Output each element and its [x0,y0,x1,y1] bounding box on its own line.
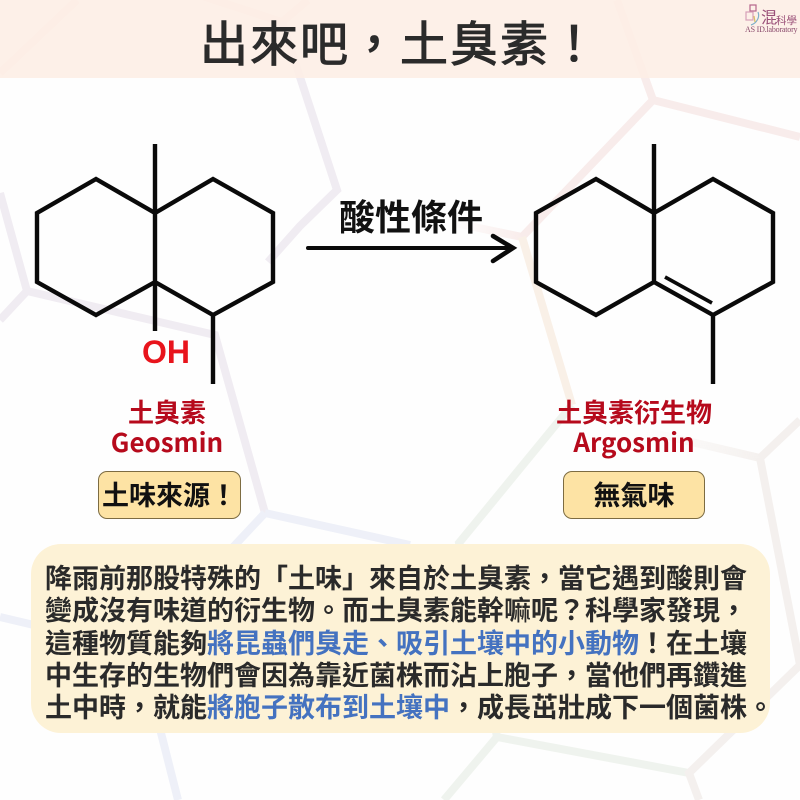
reaction condition label: 酸性條件 [339,189,483,241]
label: argosmin: 土臭素衍生物 [556,393,712,430]
explanation text [45,557,774,725]
label: argosmin: Argosmin [573,423,695,460]
logo: 混 [761,4,777,28]
header band [0,0,800,78]
logo [745,4,798,34]
explanation text: 中生存的生物們會因為靠近菌株而沾上胞子，當他們再鑽進 [45,654,747,693]
title: 出來吧，土臭素！ [200,5,600,75]
label: geosmin [111,393,223,460]
label: argosmin [556,393,712,460]
label: geosmin: Geosmin [111,423,223,460]
tag: odourless: 無氣味 [594,474,674,513]
logo: 科學 [776,13,797,28]
tag: earthy smell source: 土味來源！ [102,474,237,513]
molecule: geosmin: OH [142,334,190,370]
explanation text: 變成沒有味道的衍生物。而土臭素能幹嘛呢？科學家發現， [45,589,747,628]
panel: explanation [31,544,770,733]
explanation text: 降雨前那股特殊的「土味」來自於土臭素，當它遇到酸則會 [45,557,747,596]
explanation text: 土中時，就能將胞子散布到土壤中，成長茁壯成下一個菌株。 [45,686,774,725]
label: geosmin: 土臭素 [128,393,206,430]
tag: odourless [563,471,705,519]
logo: AS ID.laboratory [745,25,797,34]
explanation text: 這種物質能夠將昆蟲們臭走、吸引土壤中的小動物！在土壤 [45,622,747,661]
